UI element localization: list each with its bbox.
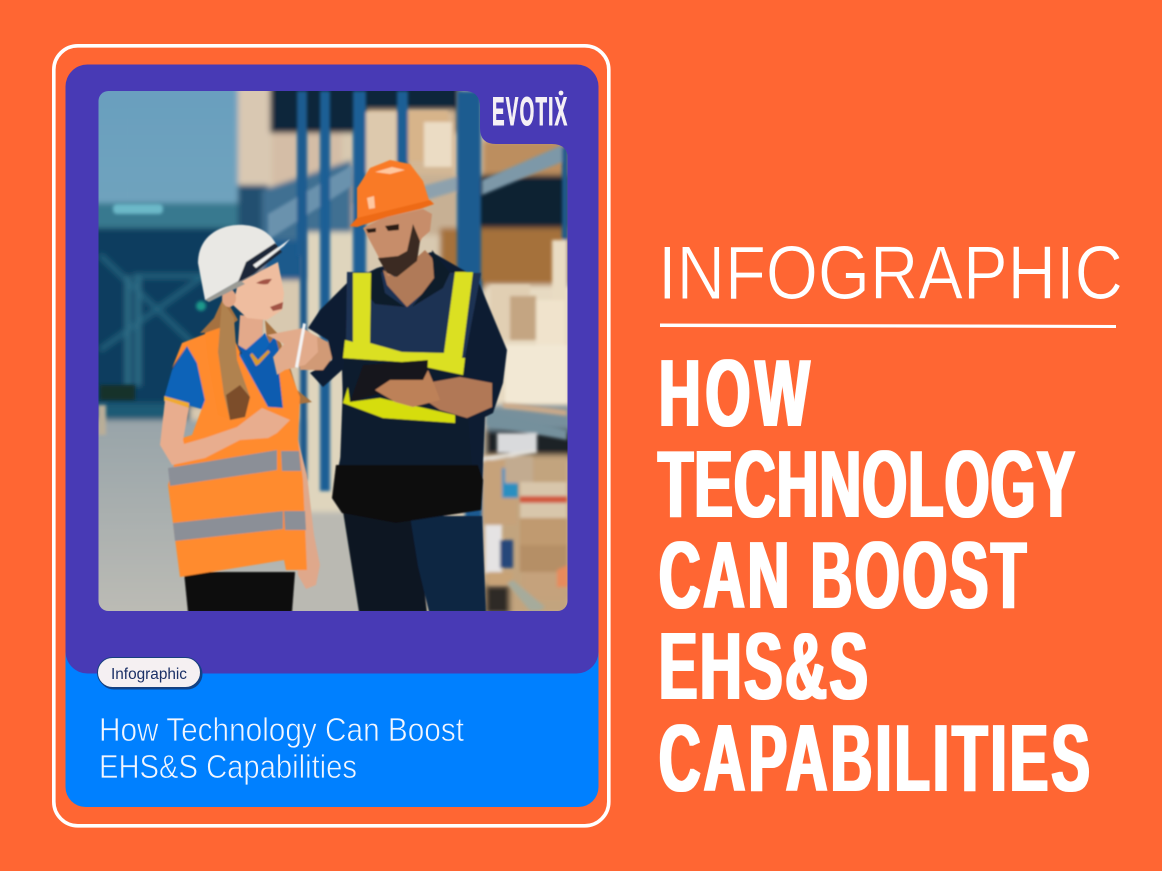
- eyes: [366, 224, 399, 233]
- collar: [370, 250, 450, 308]
- man's trousers: [342, 505, 427, 612]
- tablet: [350, 360, 428, 402]
- divider rule: [660, 324, 1116, 328]
- upper boxes: [366, 112, 396, 172]
- upper-right shelves: [482, 140, 572, 180]
- tag pill: [98, 658, 202, 690]
- card title: How Technology Can Boost: [99, 711, 464, 748]
- far boxes: [234, 91, 244, 188]
- sleeve trim: [164, 396, 189, 408]
- hand holding tablet: [375, 370, 440, 407]
- photo: man: [267, 160, 507, 612]
- main title: EHS&S: [659, 612, 868, 720]
- woman's trousers: [184, 572, 295, 612]
- main title: HOW: [659, 339, 810, 447]
- cream cartons, right: [490, 285, 530, 340]
- pale columns: [305, 232, 355, 512]
- front hair strand: [218, 300, 250, 420]
- lower hi-vis band: [343, 387, 455, 423]
- hair behind shoulders: [200, 296, 312, 404]
- pointing forearm: [296, 333, 332, 370]
- panel: purple card top: [66, 64, 598, 674]
- forearm: [425, 377, 492, 418]
- main title: [658, 339, 1090, 812]
- woman's face: [233, 262, 284, 320]
- photo: two workers in a warehouse: [90, 85, 580, 620]
- card title: EHS&S Capabilities: [99, 748, 357, 785]
- woman's ear: [222, 289, 236, 307]
- diagonal shelves: [268, 165, 352, 240]
- tag pill: Infographic: [111, 666, 187, 683]
- man's face: [363, 209, 432, 276]
- panel: card outline: [54, 46, 609, 826]
- woman's neck and chest: [237, 314, 264, 351]
- collar trim: [250, 350, 270, 366]
- photo: woman: [160, 225, 320, 612]
- main title: CAPABILITIES: [659, 704, 1090, 812]
- reflective stripes: [168, 450, 306, 541]
- woman's orange vest: [168, 332, 307, 577]
- green indicator light: [196, 301, 206, 311]
- card title: [99, 711, 464, 785]
- pointing hand: [267, 328, 318, 375]
- woman's left arm: [160, 400, 290, 465]
- panel: blue card base: [66, 300, 598, 807]
- uprights: [297, 91, 307, 256]
- main title: TECHNOLOGY: [658, 430, 1075, 538]
- vest panel: [346, 271, 482, 362]
- woman's eye and lips: [256, 279, 283, 311]
- white hard hat: [198, 225, 276, 300]
- visor: [238, 243, 282, 282]
- lower-right cartons: [497, 433, 537, 453]
- logo tab: [464, 85, 576, 160]
- stylus: [295, 323, 306, 368]
- main title: CAN BOOST: [659, 521, 1026, 629]
- dark-blue behind the aisle: [262, 160, 352, 260]
- beard: [378, 224, 420, 277]
- neck: [383, 250, 438, 307]
- photo background: warehouse: [90, 85, 580, 620]
- yellow hi-vis straps and band: [343, 272, 473, 375]
- logo: Evotix: EVOTIX: [492, 89, 567, 134]
- woman's right arm and hand: [297, 441, 320, 589]
- man's shirt: [308, 252, 507, 523]
- orange hard hat: [350, 160, 434, 227]
- dark top gaps: [270, 85, 460, 133]
- woman's blue shirt: [164, 332, 280, 410]
